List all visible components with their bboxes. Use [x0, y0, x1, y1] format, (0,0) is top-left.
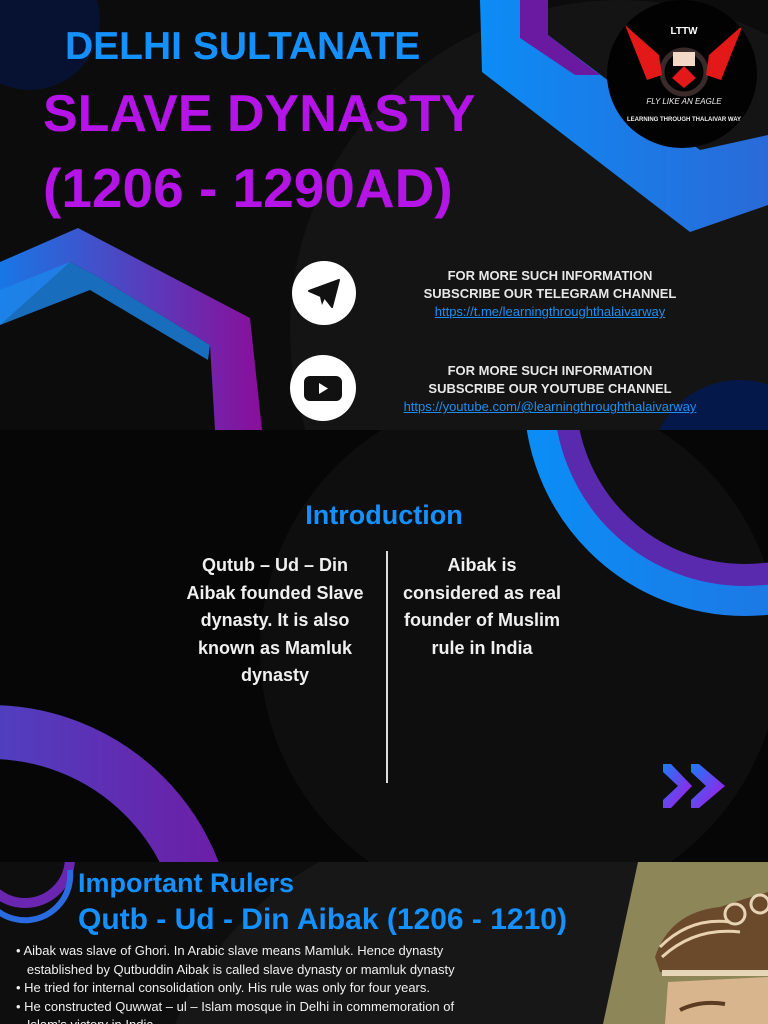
logo: LTTW: [670, 26, 698, 37]
youtube text: FOR MORE SUCH INFORMATION: [448, 363, 652, 378]
heading: introduction: Introduction: [305, 500, 463, 530]
telegram text: FOR MORE SUCH INFORMATION: [448, 268, 652, 283]
bullet list: [16, 943, 455, 1024]
divider: [386, 551, 388, 783]
bullet list: • He constructed Quwwat – ul – Islam mosque in Delhi in commemoration of: [16, 999, 454, 1014]
youtube text: [404, 363, 696, 414]
title: Slave Dynasty: SLAVE DYNASTY: [43, 85, 475, 143]
icon: youtube: [290, 355, 356, 421]
title: Delhi Sultanate: DELHI SULTANATE: [65, 25, 420, 68]
logo: LEARNING THROUGH THALAIVAR WAY: [627, 117, 741, 123]
intro text right: Aibak is: [447, 555, 517, 575]
intro text left: Qutub – Ud – Din Aibak founded Slave dynasty. It is also known as Mamluk dynasty: [186, 555, 364, 685]
telegram text: SUBSCRIBE OUR TELEGRAM CHANNEL: [424, 286, 676, 301]
logo: [607, 0, 757, 148]
intro text right: considered as real founder of Muslim rule in India: [403, 582, 561, 658]
heading: important rulers: Important Rulers: [78, 868, 294, 898]
icon: telegram: [292, 261, 356, 325]
youtube text: SUBSCRIBE OUR YOUTUBE CHANNEL: [428, 381, 672, 396]
icon: chevrons: [663, 764, 725, 808]
bullet list: • He tried for internal consolidation only. His rule was only for four years.: [16, 980, 430, 995]
portrait image: [603, 862, 768, 1024]
youtube text: https://youtube.com/@learningthroughthalaivarway: [404, 399, 696, 414]
heading: Qutb-ud-din Aibak: Qutb - Ud - Din Aibak (1206 - 1210): [78, 903, 567, 936]
logo: FLY LIKE AN EAGLE: [646, 97, 722, 106]
telegram text: [424, 268, 676, 319]
bullet list: established by Qutbuddin Aibak is called slave dynasty or mamluk dynasty: [27, 962, 455, 977]
telegram text: https://t.me/learningthroughthalaivarway: [435, 304, 665, 319]
title: dates: (1206 - 1290AD): [43, 157, 453, 219]
bullet list: • Aibak was slave of Ghori. In Arabic slave means Mamluk. Hence dynasty: [16, 943, 443, 958]
